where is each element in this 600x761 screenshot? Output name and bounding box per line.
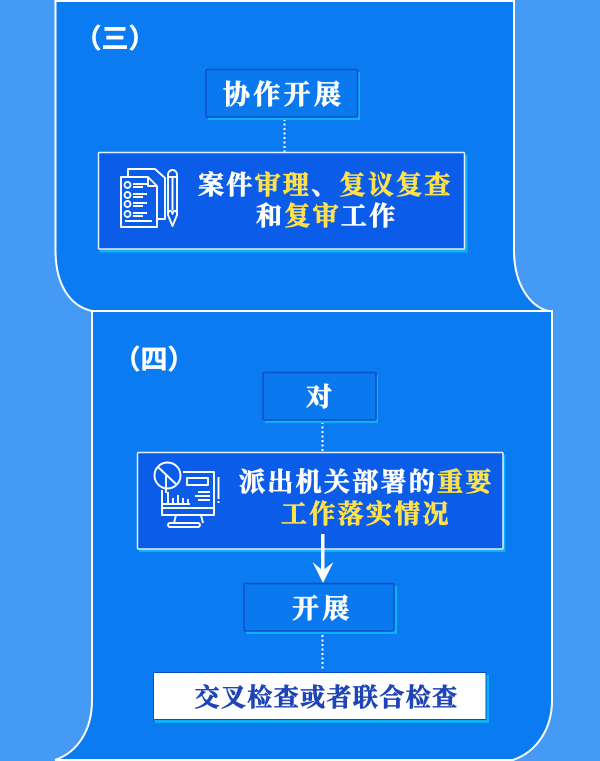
text: case review line two: 和复审工作 bbox=[256, 202, 398, 231]
box: cross inspection: 交叉检查或者联合检查 bbox=[194, 683, 459, 712]
icon: monitor with charts bbox=[154, 462, 218, 527]
heading: section three: （三） bbox=[74, 24, 156, 54]
panel: section four background bbox=[55, 311, 552, 760]
box: dispatching organ work bbox=[138, 452, 506, 552]
heading: section four: （四） bbox=[114, 345, 194, 375]
box: collaborate: 协作开展 bbox=[223, 80, 344, 110]
text: dispatching organ line two: 工作落实情况 bbox=[281, 500, 451, 529]
box: target word: 对 bbox=[306, 383, 334, 412]
text: case review line one: 案件审理、复议复查 bbox=[198, 171, 453, 200]
connector: dotted line one bbox=[284, 119, 286, 152]
icon: documents and pencil bbox=[121, 169, 177, 227]
box: carry out bbox=[244, 584, 397, 634]
panel: section three background bbox=[56, 1, 548, 311]
box: case review work bbox=[98, 152, 468, 252]
connector: dotted line three bbox=[322, 635, 324, 669]
box: carry out: 开展 bbox=[292, 594, 353, 624]
connector: dotted line two bbox=[322, 422, 324, 452]
box: collaborate bbox=[206, 70, 360, 120]
box: cross inspection bbox=[154, 672, 489, 723]
box: target word bbox=[263, 372, 378, 423]
text: dispatching organ line one: 派出机关部署的重要 bbox=[239, 468, 494, 497]
arrow: downward bbox=[312, 534, 334, 583]
